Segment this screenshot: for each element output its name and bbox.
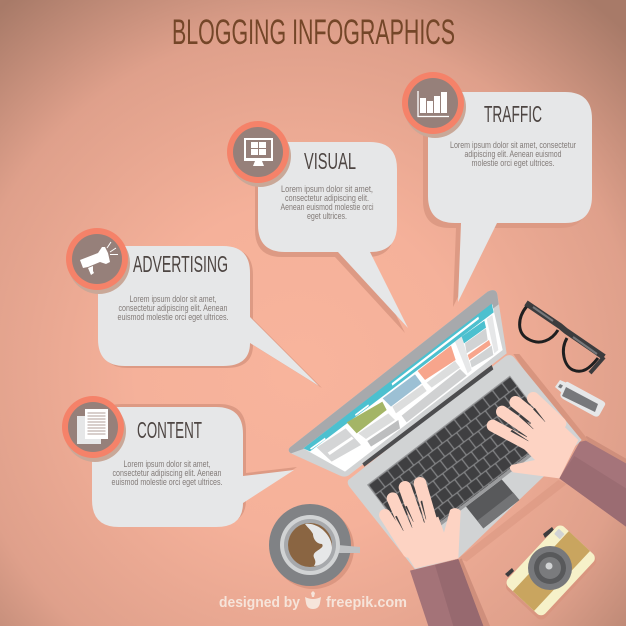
panel: visual [227, 121, 408, 333]
icon: monitor [227, 121, 291, 187]
hinge [362, 365, 493, 467]
text block: advertising: euismod molestie orci eget ultrices. [118, 311, 228, 322]
text block: traffic: molestie orci eget ultrices. [472, 157, 554, 168]
text block: visual: consectetur adipiscing elit. [285, 192, 369, 203]
laptop base [348, 354, 588, 569]
credit: freepik: designed by [219, 595, 300, 611]
text block: traffic [450, 139, 576, 168]
text block: visual: Lorem ipsum dolor sit amet, [281, 183, 373, 194]
bubble: content [92, 407, 294, 527]
text block: content: euismod molestie orci eget ultrices. [112, 476, 222, 487]
text block: visual: Aenean euismod molestie orci [280, 201, 374, 212]
text block: advertising [118, 293, 228, 322]
camera [502, 523, 599, 622]
glasses [520, 303, 604, 373]
trackpad [466, 479, 519, 528]
browser bar [303, 304, 494, 451]
text block: advertising: Lorem ipsum dolor sit amet, [130, 293, 216, 304]
credit: freepik [219, 591, 407, 611]
heading: content: CONTENT [137, 417, 202, 443]
text block: advertising: consectetur adipiscing elit. Aenean [118, 302, 228, 313]
text block: content: consectetur adipiscing elit. Aenean [112, 467, 222, 478]
text block: visual: eget ultrices. [307, 210, 347, 221]
heading: advertising: ADVERTISING [133, 251, 228, 277]
bubble: traffic [428, 92, 592, 302]
panel: advertising [66, 228, 322, 388]
title: BLOGGING INFOGRAPHICS [172, 13, 455, 52]
laptop screen [289, 290, 507, 477]
coffee foam [305, 524, 332, 566]
coffee cup [269, 504, 360, 589]
panel: content [62, 396, 297, 527]
icon: bar chart [402, 72, 466, 138]
credit: freepik: freepik.com [326, 595, 407, 611]
bubble: advertising [98, 246, 319, 386]
panel: traffic [402, 72, 592, 307]
text block: traffic: adipiscing elit. Aenean euismod [464, 148, 562, 159]
icon: documents [62, 396, 126, 462]
icon: megaphone [66, 228, 130, 294]
bubble: visual [258, 142, 408, 328]
left sleeve [410, 558, 490, 626]
text block: traffic: Lorem ipsum dolor sit amet, consectetur [450, 139, 576, 150]
hand: right [493, 398, 578, 478]
text block: content [112, 458, 222, 487]
display [303, 304, 503, 472]
text block: visual [280, 183, 374, 221]
sleeve: right arm [559, 436, 626, 527]
heading: traffic: TRAFFIC [484, 101, 542, 127]
usb drive [555, 380, 605, 417]
hand: left [383, 483, 490, 626]
page panels [317, 315, 498, 462]
text block: content: Lorem ipsum dolor sit amet, [124, 458, 210, 469]
heading: visual: VISUAL [304, 148, 356, 174]
keyboard [367, 375, 557, 546]
